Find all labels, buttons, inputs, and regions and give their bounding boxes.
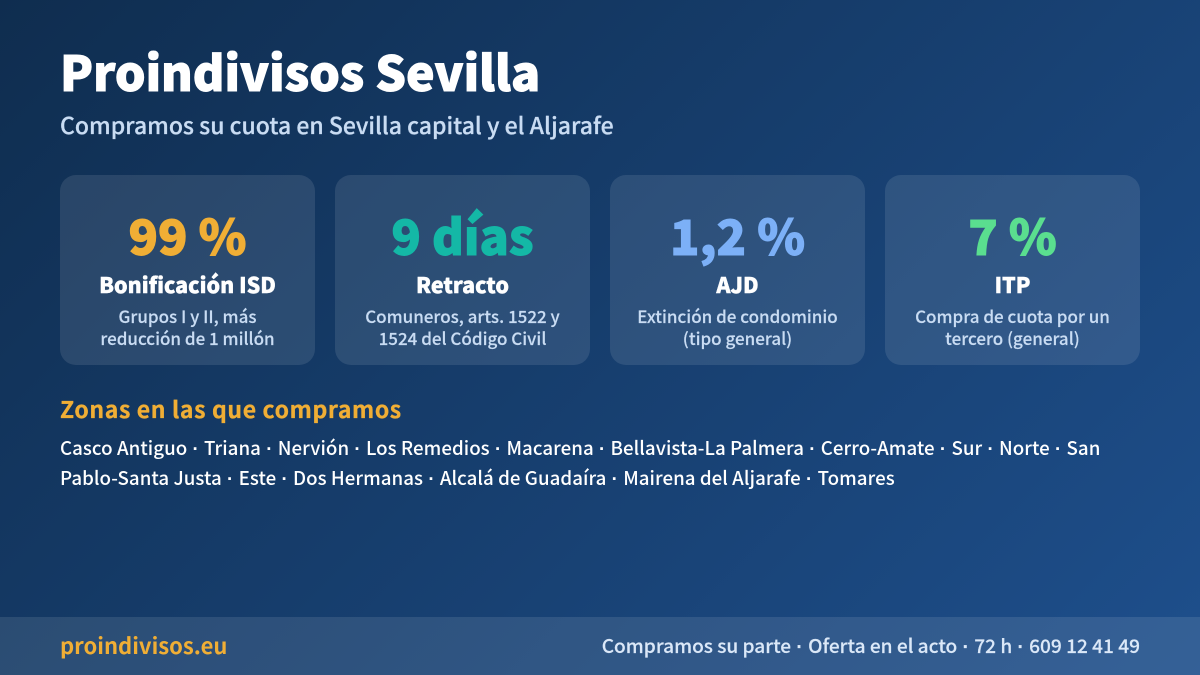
- panel: ITP: [885, 175, 1140, 365]
- stat description: tercero (general): [945, 325, 1080, 350]
- stat description: 1524 del Código Civil: [379, 325, 546, 350]
- stat value: 7 %: [968, 199, 1057, 269]
- title: Proindivisos Sevilla: [60, 35, 540, 105]
- stat label: Retracto: [416, 269, 509, 300]
- panel: AJD: [610, 175, 865, 365]
- stat value: 9 días: [391, 199, 534, 269]
- stat label: ITP: [995, 269, 1030, 300]
- stat description: reducción de 1 millón: [100, 325, 275, 350]
- stat description: [100, 303, 275, 350]
- stat value: 1,2 %: [670, 199, 805, 269]
- zones list: Casco Antiguo · Triana · Nervión · Los Remedios · Macarena · Bellavista-La Palmera · Cerro-Amate · Sur · Norte · San: [60, 434, 1100, 461]
- stat label: Bonificación ISD: [99, 269, 276, 300]
- zones list: [60, 434, 1100, 491]
- panel: Retracto: [335, 175, 590, 365]
- stat description: Comuneros, arts. 1522 y: [365, 303, 560, 328]
- stat label: AJD: [716, 269, 759, 300]
- footer bar: [0, 617, 1200, 675]
- stat value: 99 %: [128, 199, 246, 269]
- footer website: proindivisos.eu: [60, 629, 227, 661]
- zones heading: Zonas en las que compramos: [60, 391, 402, 425]
- stat description: (tipo general): [683, 325, 792, 350]
- stat description: [365, 303, 560, 350]
- subtitle: Compramos su cuota en Sevilla capital y el Aljarafe: [60, 107, 614, 141]
- panel: Bonificación ISD: [60, 175, 315, 365]
- zones list: Pablo-Santa Justa · Este · Dos Hermanas · Alcalá de Guadaíra · Mairena del Aljarafe · Tomares: [60, 464, 895, 491]
- stat description: Extinción de condominio: [637, 303, 838, 328]
- stat description: Grupos I y II, más: [118, 303, 257, 328]
- stat description: Compra de cuota por un: [915, 303, 1110, 328]
- footer contact line: Compramos su parte · Oferta en el acto · 72 h · 609 12 41 49: [602, 631, 1140, 659]
- stat description: [915, 303, 1110, 350]
- stat description: [637, 303, 838, 350]
